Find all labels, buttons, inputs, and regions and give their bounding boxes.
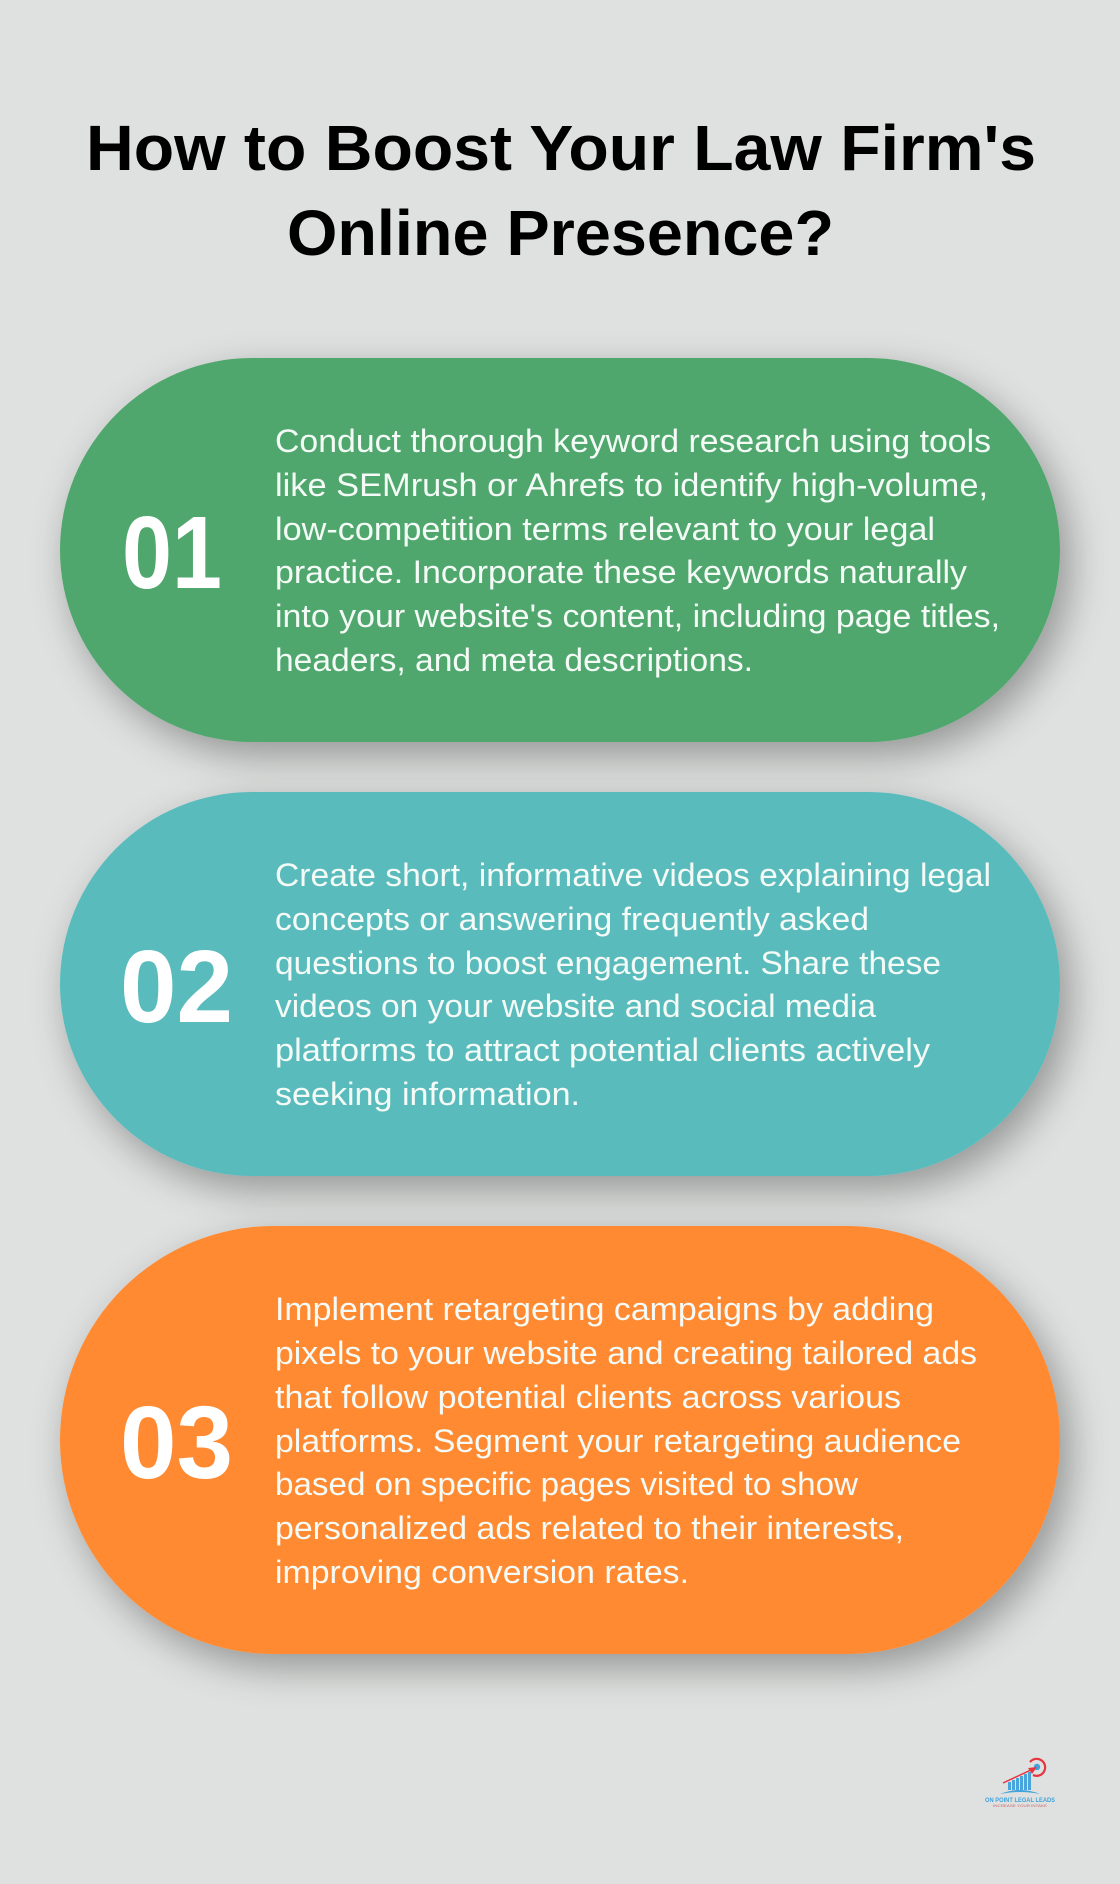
- text block: retargeting: platforms. Segment your retargeting audience: [275, 1423, 961, 1459]
- target ring: [1030, 1759, 1045, 1776]
- text block: keyword research: low-competition terms relevant to your legal: [275, 511, 935, 547]
- text block: videos: seeking information.: [275, 1076, 580, 1112]
- text block: retargeting: improving conversion rates.: [275, 1554, 689, 1590]
- text block: retargeting: pixels to your website and creating tailored ads: [275, 1335, 977, 1371]
- text block: videos: platforms to attract potential clients actively: [275, 1032, 930, 1068]
- text block: keyword research: [275, 423, 1000, 678]
- target centre: [1034, 1764, 1040, 1770]
- title: [86, 112, 1036, 269]
- arrow: [1003, 1769, 1033, 1783]
- bars: [1008, 1772, 1031, 1790]
- text block: keyword research: into your website's content, including page titles,: [275, 598, 1000, 634]
- number 01: 01: [122, 495, 222, 610]
- panel: step 02: [60, 792, 1060, 1176]
- tagline: INCREASE YOUR INTAKE: [993, 1804, 1048, 1808]
- text block: keyword research: headers, and meta descriptions.: [275, 642, 753, 678]
- title: Online Presence?: [287, 197, 834, 269]
- text block: retargeting: personalized ads related to their interests,: [275, 1510, 904, 1546]
- wordmark: ON POINT LEGAL LEADS: [985, 1797, 1056, 1804]
- text block: videos: questions to boost engagement. Share these: [275, 945, 941, 981]
- panel: step 03: [60, 1226, 1060, 1654]
- text block: retargeting: based on specific pages visited to show: [275, 1466, 859, 1502]
- title: How to Boost Your Law Firm's: [86, 112, 1036, 184]
- text block: videos: concepts or answering frequently asked: [275, 901, 869, 937]
- panel: step 01: [60, 358, 1060, 742]
- text block: videos: videos on your website and social media: [275, 988, 876, 1024]
- text block: keyword research: like SEMrush or Ahrefs to identify high-volume,: [275, 467, 988, 503]
- text block: retargeting: that follow potential clients across various: [275, 1379, 901, 1415]
- text block: keyword research: Conduct thorough keyword research using tools: [275, 423, 991, 459]
- pill: green: [60, 358, 1060, 742]
- text block: retargeting: [275, 1291, 977, 1590]
- pill: orange: [60, 1226, 1060, 1654]
- icon: On Point Legal Leads logo: [985, 1759, 1056, 1808]
- pill: teal: [60, 792, 1060, 1176]
- text block: keyword research: practice. Incorporate these keywords naturally: [275, 554, 967, 590]
- number 03: 03: [120, 1385, 233, 1500]
- text block: videos: [275, 857, 991, 1112]
- base arc: [1000, 1790, 1040, 1794]
- text block: videos: Create short, informative videos explaining legal: [275, 857, 991, 893]
- number 02: 02: [120, 929, 233, 1044]
- text block: retargeting: Implement retargeting campaigns by adding: [275, 1291, 934, 1327]
